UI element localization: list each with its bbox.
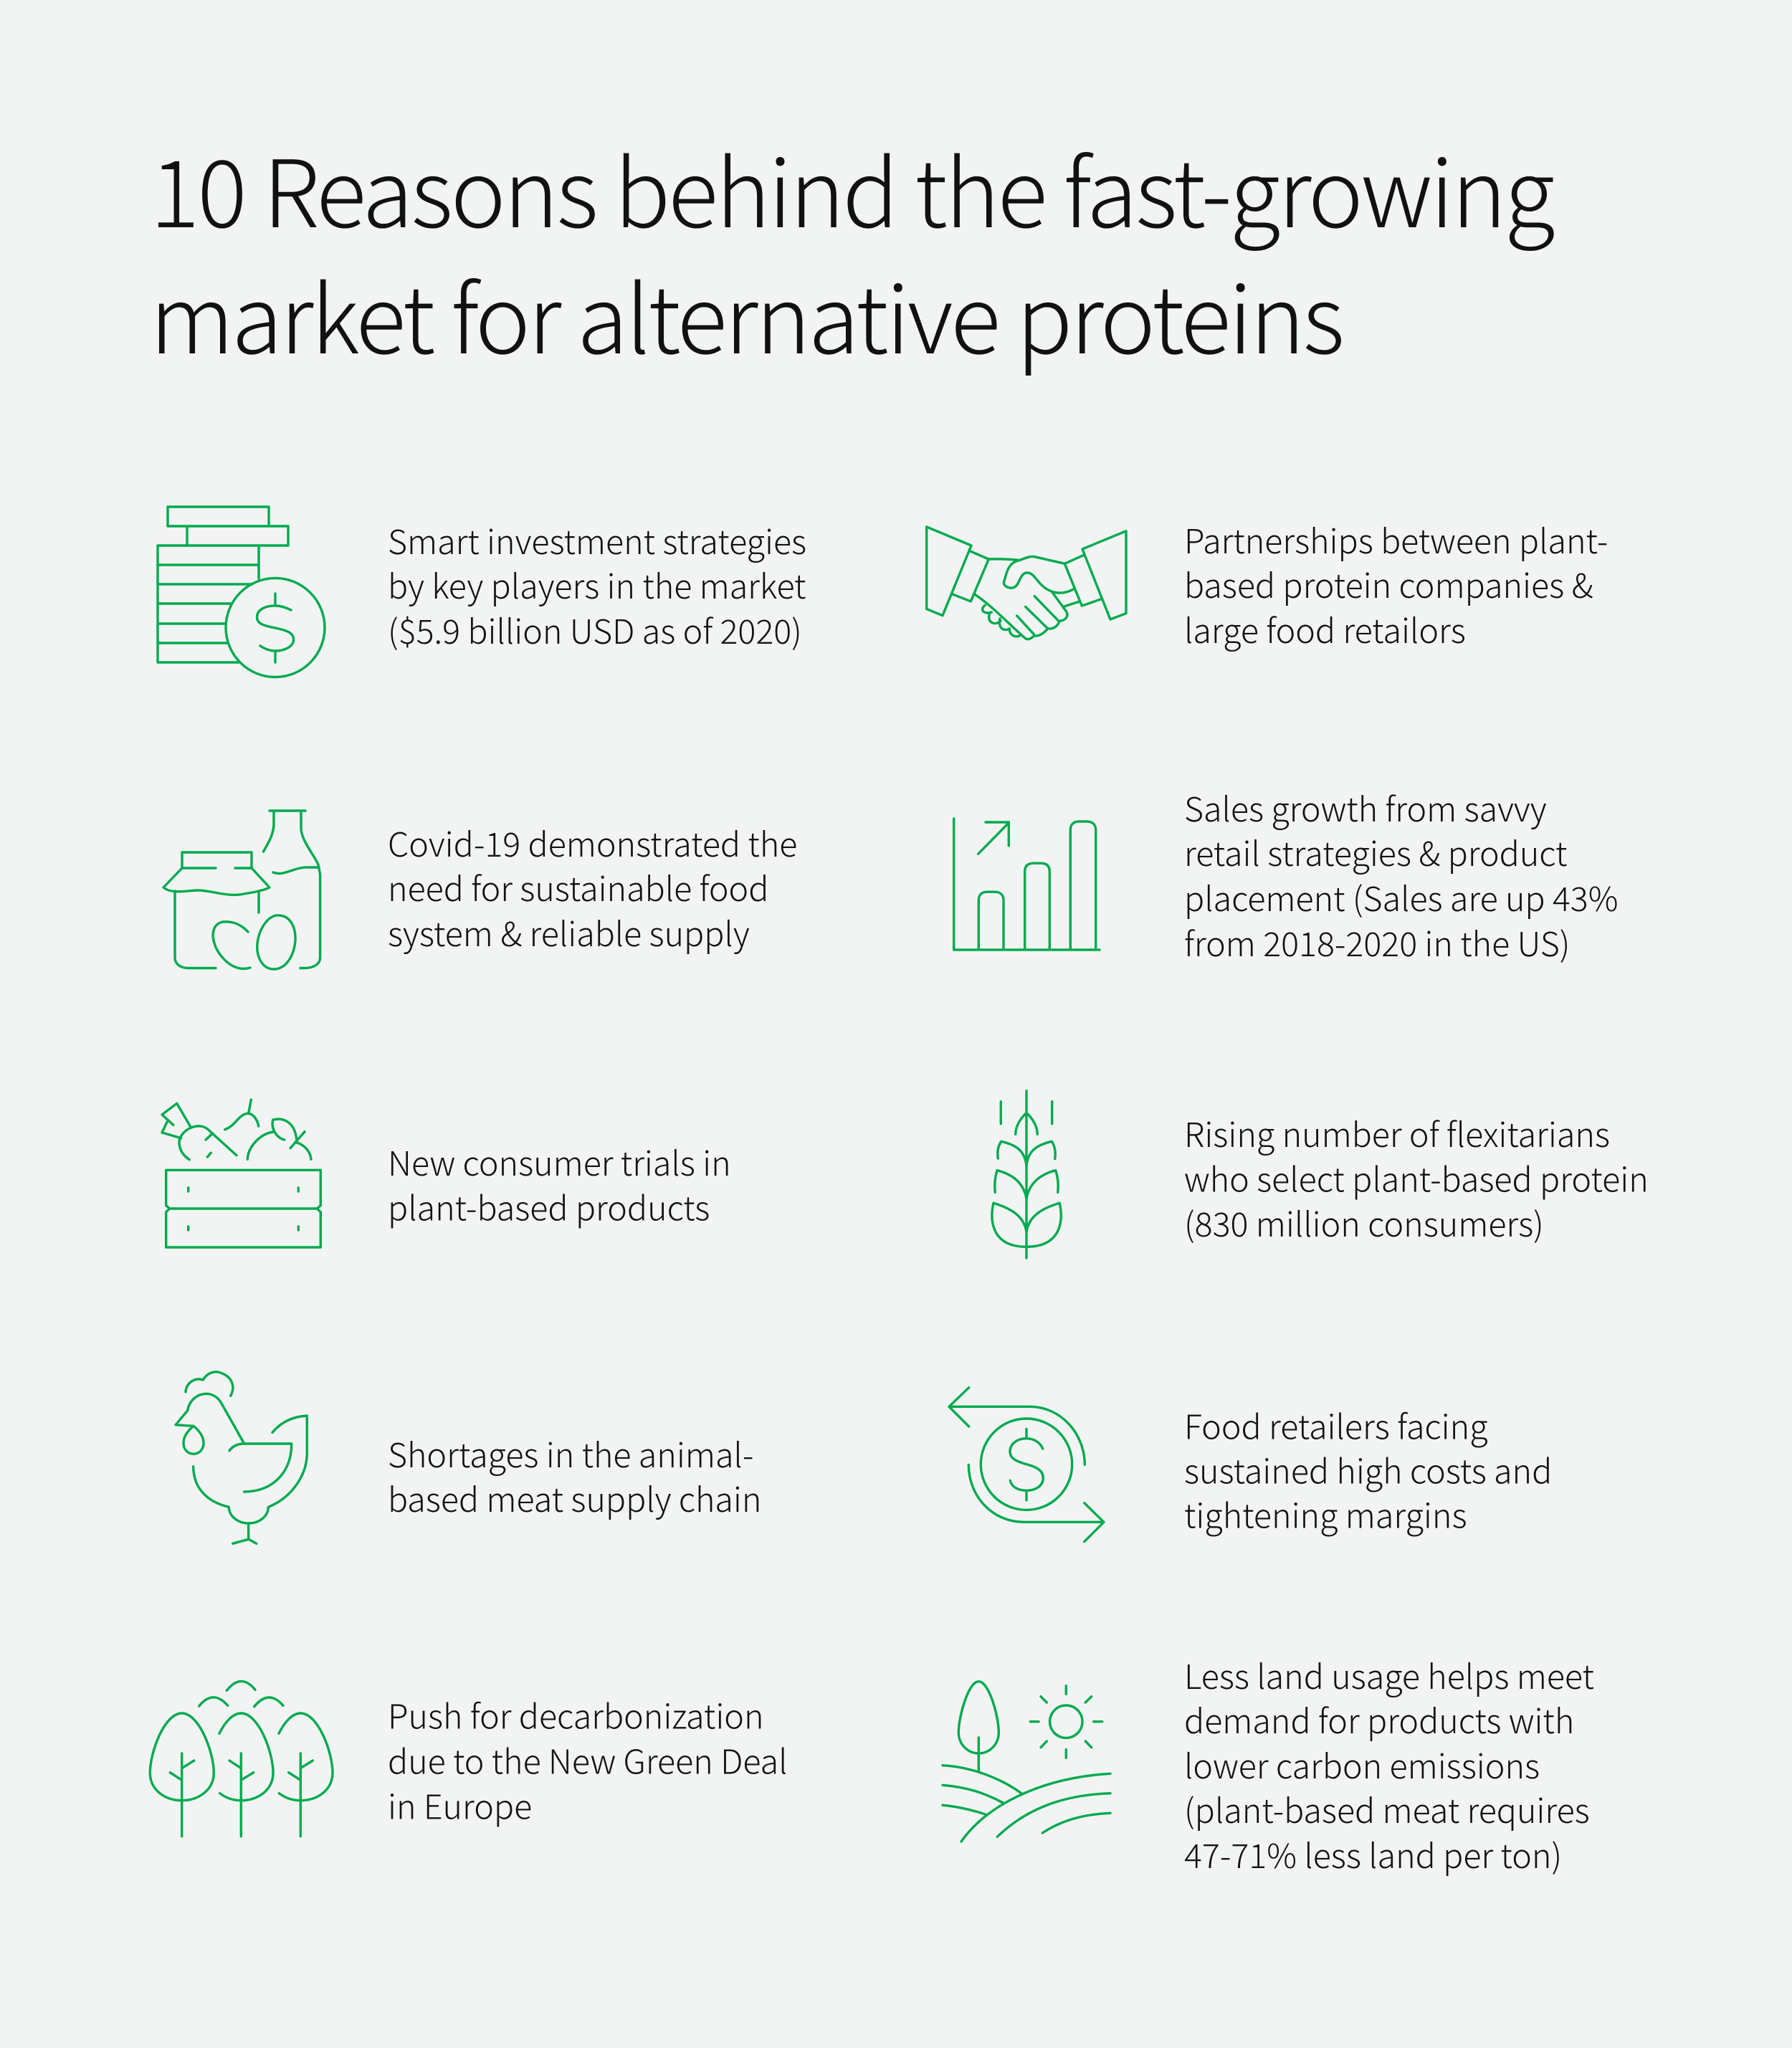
text: land usage: lower carbon emissions (1184, 1740, 1540, 1789)
icon: coin stack with dollar (158, 507, 325, 677)
text: sales growth: placement (Sales are up 43% (1184, 873, 1619, 921)
text: decarbonization: in Europe (388, 1781, 532, 1829)
text: land usage (1184, 1651, 1594, 1878)
text: land usage: Less land usage helps meet (1184, 1651, 1594, 1699)
icon: dollar with circular arrows (949, 1388, 1104, 1542)
text: consumer trials: New consumer trials in (388, 1138, 731, 1186)
text: meat supply shortage: based meat supply chain (388, 1474, 761, 1522)
text: investment strategies (388, 516, 806, 654)
text: consumer trials (388, 1138, 731, 1230)
icon: trees (150, 1681, 333, 1837)
panel: flexitarians (992, 1091, 1649, 1258)
panel: retailer costs (949, 1388, 1552, 1542)
text: sales growth: from 2018-2020 in the US) (1184, 918, 1570, 966)
text: land usage: 47-71% less land per ton) (1184, 1830, 1562, 1878)
icon: bar chart with arrow (954, 819, 1100, 950)
panel: land usage (943, 1651, 1594, 1878)
panel: sales growth (954, 784, 1619, 966)
title (150, 120, 1555, 381)
panel: investment strategies (158, 507, 806, 677)
icon: handshake (927, 527, 1126, 639)
text: retailer costs: tightening margins (1184, 1490, 1467, 1538)
text: retailer costs: sustained high costs and (1184, 1445, 1552, 1494)
text: covid-19: Covid-19 demonstrated the (388, 819, 797, 867)
text: land usage: demand for products with (1184, 1695, 1574, 1743)
text: investment strategies: by key players in the market (388, 561, 806, 609)
text: flexitarians: Rising number of flexitarians (1184, 1109, 1610, 1157)
panel: meat supply shortage (176, 1372, 761, 1543)
text: sales growth: retail strategies & product (1184, 828, 1567, 876)
icon: landscape with tree and sun (943, 1682, 1110, 1842)
text: retailer costs: Food retailers facing (1184, 1401, 1488, 1449)
text: sales growth: Sales growth from savvy (1184, 784, 1547, 832)
text: covid-19 (388, 819, 797, 956)
text: meat supply shortage: Shortages in the animal- (388, 1429, 753, 1477)
text: consumer trials: plant-based products (388, 1183, 710, 1230)
icon: vegetable crate (162, 1100, 320, 1247)
title: market for alternative proteins (150, 246, 1343, 381)
text: flexitarians: who select plant-based protein (1184, 1154, 1649, 1201)
text: covid-19: system & reliable supply (388, 908, 750, 956)
text: flexitarians (1184, 1109, 1649, 1247)
text: meat supply shortage (388, 1429, 761, 1522)
text: decarbonization: Push for decarbonization (388, 1690, 764, 1739)
text: partnerships (1184, 515, 1608, 653)
text: flexitarians: (830 million consumers) (1184, 1199, 1544, 1247)
panel: decarbonization (150, 1681, 788, 1837)
text: retailer costs (1184, 1401, 1552, 1538)
icon: wheat (992, 1091, 1061, 1258)
text: partnerships: based protein companies & (1184, 560, 1593, 608)
text: partnerships: Partnerships between plant- (1184, 515, 1608, 563)
text: covid-19: need for sustainable food (388, 863, 768, 911)
panel: consumer trials (162, 1100, 731, 1247)
panel: covid-19 (163, 811, 797, 969)
text: decarbonization: due to the New Green Deal (388, 1736, 788, 1783)
panel: partnerships (927, 515, 1608, 653)
icon: chicken (176, 1372, 307, 1543)
title: 10 Reasons behind the fast-growing (150, 120, 1555, 254)
text: sales growth (1184, 784, 1619, 966)
icon: jar, bottle and eggs (163, 811, 320, 969)
text: investment strategies: ($5.9 billion USD as of 2020) (388, 606, 802, 654)
text: partnerships: large food retailors (1184, 605, 1466, 653)
text: investment strategies: Smart investment strategies (388, 516, 806, 564)
text: decarbonization (388, 1690, 788, 1829)
text: land usage: (plant-based meat requires (1184, 1785, 1590, 1833)
